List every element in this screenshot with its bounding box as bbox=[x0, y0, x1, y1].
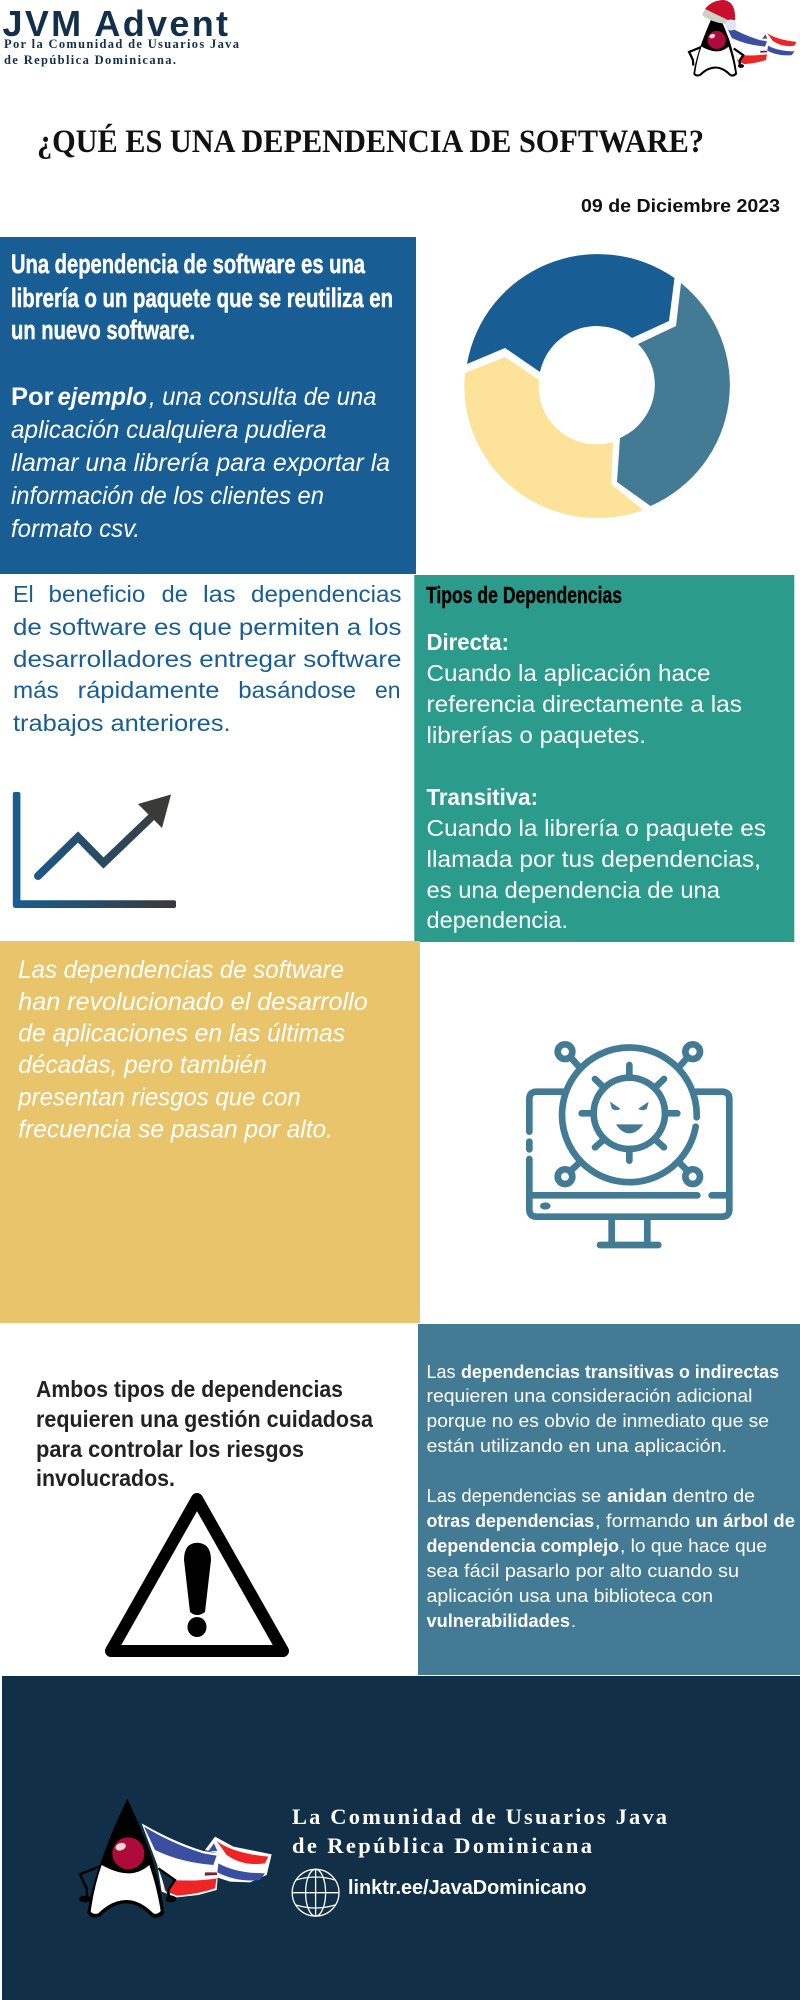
text block: management warning: involucrados. bbox=[36, 1465, 175, 1491]
paragraph: nesting: sea fácil pasarlo por alto cuando su bbox=[426, 1561, 739, 1581]
footer heading bbox=[292, 1804, 667, 1858]
text block: benefit: desarrolladores entregar software bbox=[13, 646, 402, 672]
paragraph: nesting: aplicación usa una biblioteca con bbox=[426, 1586, 713, 1606]
risks text bbox=[17, 956, 368, 1144]
footer heading: de República Dominicana bbox=[292, 1833, 592, 1858]
risks text: Las dependencias de software bbox=[18, 956, 344, 984]
example text: llamar una librería para exportar la bbox=[11, 449, 390, 477]
paragraph: nesting: . bbox=[571, 1611, 576, 1631]
text block: benefit: basándose bbox=[238, 677, 356, 703]
text block: management warning bbox=[36, 1376, 373, 1491]
brand subtitle: Por la Comunidad de Usuarios Java bbox=[4, 37, 240, 51]
text block: benefit: más bbox=[13, 677, 59, 703]
transitive dependency: llamada por tus dependencias, bbox=[426, 846, 761, 872]
paragraph: consideration: dependencias transitivas o indirectas bbox=[461, 1362, 779, 1382]
paragraph: nesting: un árbol de bbox=[695, 1511, 795, 1531]
date: 09 de Diciembre 2023 bbox=[581, 196, 780, 216]
paragraph: consideration: porque no es obvio de inmediato que se bbox=[426, 1411, 769, 1431]
text block: benefit: en bbox=[375, 677, 400, 703]
paragraph: consideration bbox=[426, 1362, 779, 1456]
example text: formato csv. bbox=[11, 515, 140, 543]
transitive dependency: dependencia. bbox=[426, 907, 568, 933]
risks text: han revolucionado el desarrollo bbox=[18, 988, 368, 1016]
panel: definition bbox=[0, 237, 416, 574]
direct dependency: Cuando la aplicación hace bbox=[426, 660, 710, 686]
text block: benefit bbox=[13, 581, 402, 736]
text block: benefit: las bbox=[203, 581, 236, 607]
direct dependency: referencia directamente a las bbox=[426, 691, 742, 717]
risks text: de aplicaciones en las últimas bbox=[18, 1020, 345, 1048]
text block: benefit: beneficio bbox=[48, 581, 145, 607]
paragraph: nesting: dentro de bbox=[672, 1486, 755, 1506]
risks text: frecuencia se pasan por alto. bbox=[18, 1116, 333, 1144]
text block: benefit: trabajos anteriores. bbox=[13, 710, 231, 736]
risks text: presentan riesgos que con bbox=[17, 1084, 301, 1112]
transitive dependency: es una dependencia de una bbox=[426, 877, 720, 903]
definition heading: Una dependencia de software es una bbox=[11, 249, 366, 279]
icon: globe bbox=[292, 1869, 339, 1916]
header: JVM Advent branding bbox=[2, 3, 240, 67]
panel: risks bbox=[0, 941, 420, 1323]
paragraph: consideration: están utilizando en una aplicación. bbox=[426, 1436, 727, 1456]
transitive dependency bbox=[426, 784, 766, 933]
paragraph: nesting: Las dependencias se bbox=[426, 1486, 601, 1506]
paragraph: nesting: , formando bbox=[595, 1511, 690, 1531]
brand subtitle bbox=[4, 37, 240, 67]
paragraph: nesting bbox=[426, 1486, 795, 1631]
paragraph: consideration: requieren una consideración adicional bbox=[426, 1386, 752, 1406]
donut segment: blue bbox=[467, 254, 674, 372]
footer heading: La Comunidad de Usuarios Java bbox=[292, 1804, 667, 1829]
definition heading: un nuevo software. bbox=[11, 315, 195, 345]
donut segment: yellow bbox=[464, 357, 643, 518]
example text: información de los clientes en bbox=[11, 482, 324, 510]
panel: footer bbox=[2, 1676, 800, 2000]
icon: computer virus on monitor bbox=[529, 1044, 729, 1245]
icon: Santa hat bbox=[702, 0, 736, 30]
example text: ejemplo bbox=[58, 383, 147, 411]
text block: benefit: de bbox=[162, 581, 188, 607]
transitive dependency: Transitiva: bbox=[426, 784, 538, 810]
direct dependency: Directa: bbox=[426, 629, 509, 655]
example text: aplicación cualquiera pudiera bbox=[11, 416, 327, 444]
panel heading: Tipos de Dependencias bbox=[426, 582, 622, 608]
text block: management warning: para controlar los riesgos bbox=[36, 1436, 304, 1462]
text block: benefit: dependencias bbox=[251, 581, 402, 607]
brand name: JVM Advent bbox=[2, 3, 228, 44]
example text: , una consulta de una bbox=[149, 383, 377, 411]
paragraph: nesting: vulnerabilidades bbox=[426, 1611, 570, 1631]
transitive dependency: Cuando la librería o paquete es bbox=[426, 815, 766, 841]
footer link: linktr.ee/JavaDominicano bbox=[348, 1877, 586, 1899]
icon: Duke mascot with Santa hat and flag bbox=[689, 0, 798, 77]
title: ¿QUÉ ES UNA DEPENDENCIA DE SOFTWARE? bbox=[37, 123, 704, 160]
example text: Por bbox=[11, 383, 54, 411]
definition heading: librería o un paquete que se reutiliza en bbox=[11, 283, 393, 313]
donut segment: slate bbox=[617, 283, 730, 506]
paragraph: nesting: anidan bbox=[607, 1486, 667, 1506]
text block: benefit: rápidamente bbox=[78, 677, 219, 703]
direct dependency bbox=[426, 629, 742, 748]
direct dependency: librerías o paquetes. bbox=[426, 722, 646, 748]
brand subtitle: de República Dominicana. bbox=[4, 53, 176, 67]
paragraph: nesting: , lo que hace que bbox=[620, 1536, 767, 1556]
text block: benefit: de software es que permiten a los bbox=[13, 614, 402, 640]
text block: benefit: El bbox=[13, 581, 34, 607]
paragraph: consideration: Las bbox=[426, 1362, 456, 1382]
panel: types of dependencies bbox=[414, 575, 794, 942]
icon: warning triangle bbox=[111, 1499, 283, 1651]
example text bbox=[11, 383, 390, 543]
icon: growth chart with arrow bbox=[13, 792, 176, 908]
paragraph: nesting: dependencia complejo bbox=[426, 1536, 619, 1556]
risks text: décadas, pero también bbox=[18, 1051, 267, 1079]
definition heading bbox=[11, 249, 393, 345]
text block: management warning: requieren una gestión cuidadosa bbox=[36, 1406, 373, 1432]
text block: management warning: Ambos tipos de dependencias bbox=[36, 1376, 343, 1402]
panel: transitive dependencies bbox=[418, 1324, 800, 1675]
paragraph: nesting: otras dependencias bbox=[426, 1511, 594, 1531]
icon: Duke mascot with flag bbox=[79, 1799, 272, 1918]
chart: cycle donut bbox=[464, 254, 730, 518]
